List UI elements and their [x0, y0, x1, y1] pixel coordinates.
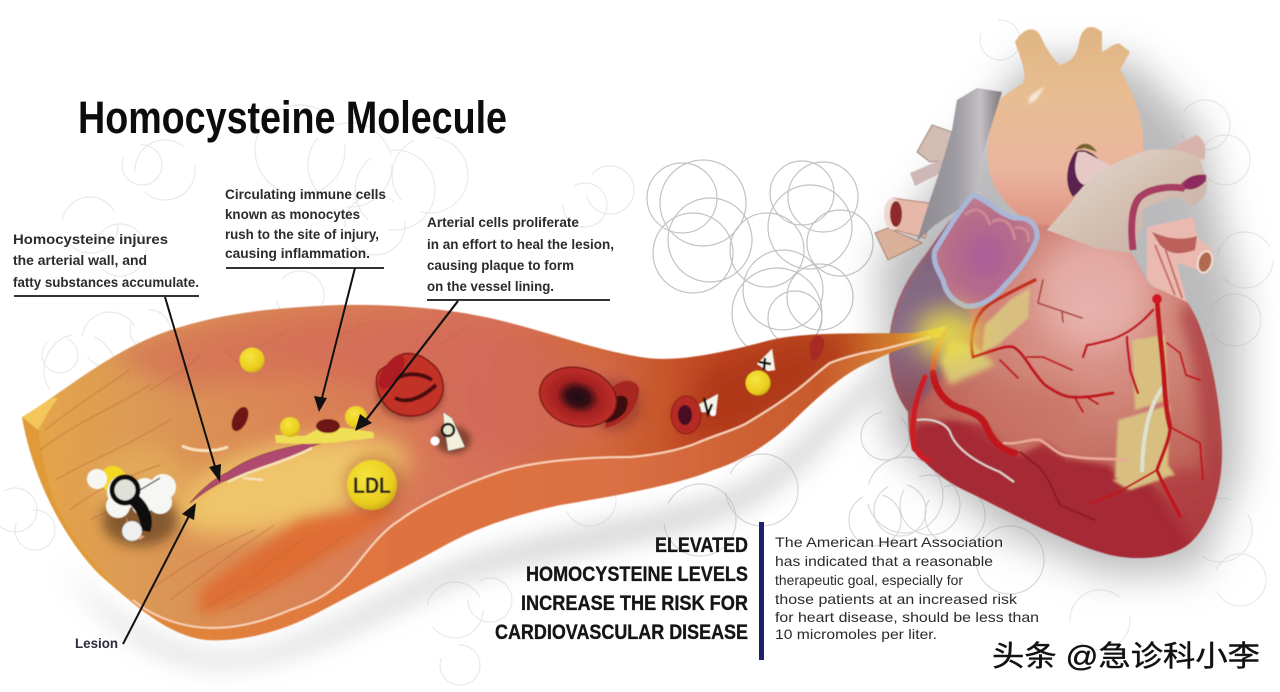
callout: monocytes: rush to the site of injury, [225, 227, 379, 242]
arrow: to injury [165, 297, 221, 482]
small pale fibre [182, 446, 228, 451]
aortic opening [1067, 144, 1112, 197]
callout: arterial cells: Arterial cells proliferate [427, 215, 579, 230]
headline: elevated homocysteine: ELEVATED [655, 534, 748, 557]
paragraph: American Heart Association: those patients at an increased risk [775, 591, 1018, 607]
title: Homocysteine Molecule [78, 92, 507, 143]
heart shadow [880, 60, 1240, 575]
headline: elevated homocysteine [495, 534, 748, 644]
callout: arterial cells: causing plaque to form [427, 258, 574, 273]
right atrium [934, 195, 1037, 306]
homocysteine molecule small 2 [757, 349, 775, 371]
vessel: green-grey vein [1142, 387, 1163, 472]
plaque [275, 428, 374, 444]
paragraph: American Heart Association: has indicated that a reasonable [775, 553, 993, 569]
pulmonary artery [1047, 149, 1207, 253]
label: lesion: Lesion [75, 636, 118, 651]
LDL particle [344, 454, 404, 514]
red blood cell large [533, 359, 641, 435]
arrow: lesion [123, 503, 196, 644]
callout: homocysteine injures: fatty substances accumulate. [13, 275, 199, 290]
divider bar [759, 522, 764, 660]
lesion pale edge [228, 448, 312, 482]
callout: homocysteine injures: the arterial wall, and [13, 253, 147, 268]
fat deposits [940, 288, 1175, 490]
pulmonary right branches [1147, 217, 1215, 307]
red blood cell distant [810, 336, 824, 361]
monocyte passing through [228, 404, 252, 434]
paragraph: American Heart Association [775, 534, 1039, 642]
homocysteine molecule medium [430, 412, 471, 454]
heart body [889, 220, 1222, 558]
pulmonary open end [1182, 171, 1208, 193]
pulmonary inner band [1132, 178, 1206, 250]
aorta [988, 27, 1143, 232]
paragraph: American Heart Association: The American Heart Association [775, 534, 1003, 550]
callout: arterial cells [427, 215, 614, 301]
atrium lobes [965, 210, 1028, 242]
watermark: 头条 @急诊科小李 [992, 640, 1260, 673]
heart [875, 27, 1225, 570]
headline: elevated homocysteine: INCREASE THE RISK FOR [521, 592, 748, 615]
ventricle shading [889, 220, 1225, 570]
left stub vessels [875, 125, 955, 260]
headline: elevated homocysteine: HOMOCYSTEINE LEVELS [526, 563, 748, 586]
callout: homocysteine injures: Homocysteine injures [13, 232, 168, 247]
artery wall highlight line [133, 337, 930, 628]
pale coronary branches [1003, 440, 1130, 460]
vessel: grey vein on ventricle [917, 420, 1014, 482]
paragraph: American Heart Association: 10 micromoles per liter. [775, 626, 937, 642]
homocysteine molecule small 1 [696, 394, 718, 416]
superior vena cava [917, 88, 1002, 241]
callout: monocytes: Circulating immune cells [225, 187, 386, 202]
callout: arterial cells: on the vessel lining. [427, 279, 554, 294]
callout: arterial cells: in an effort to heal the lesion, [427, 237, 614, 252]
artery wall streaks [40, 322, 510, 610]
yellow inflammation glow [916, 309, 980, 361]
aorta highlights [1028, 86, 1045, 104]
artery lumen shading [15, 315, 950, 660]
monocyte in lesion [316, 419, 340, 433]
artery shadow [60, 370, 880, 666]
callout: homocysteine injures [13, 232, 199, 297]
yellow particles [240, 348, 770, 437]
artery cross-section [15, 305, 980, 660]
paragraph: American Heart Association: therapeutic goal, especially for [775, 572, 963, 588]
arrow: to plaque [355, 301, 458, 431]
paragraph: American Heart Association: for heart disease, should be less than [775, 609, 1039, 625]
homocysteine molecule large [87, 466, 178, 546]
lesion [190, 440, 330, 503]
orange coronary root [933, 330, 945, 375]
artery base [22, 305, 947, 640]
coronary arteries [913, 280, 1203, 520]
red blood cell swirl [376, 353, 444, 420]
LDL particle: LDL [353, 473, 391, 498]
red blood cell small [671, 396, 701, 434]
callout: monocytes: known as monocytes [225, 207, 360, 222]
callout: monocytes: causing inflammation. [225, 246, 370, 261]
pulmonary artery top branch [1170, 135, 1205, 160]
arrow: to monocyte [314, 268, 355, 412]
callout: monocytes [225, 187, 386, 269]
headline: elevated homocysteine: CARDIOVASCULAR DISEASE [495, 621, 748, 644]
